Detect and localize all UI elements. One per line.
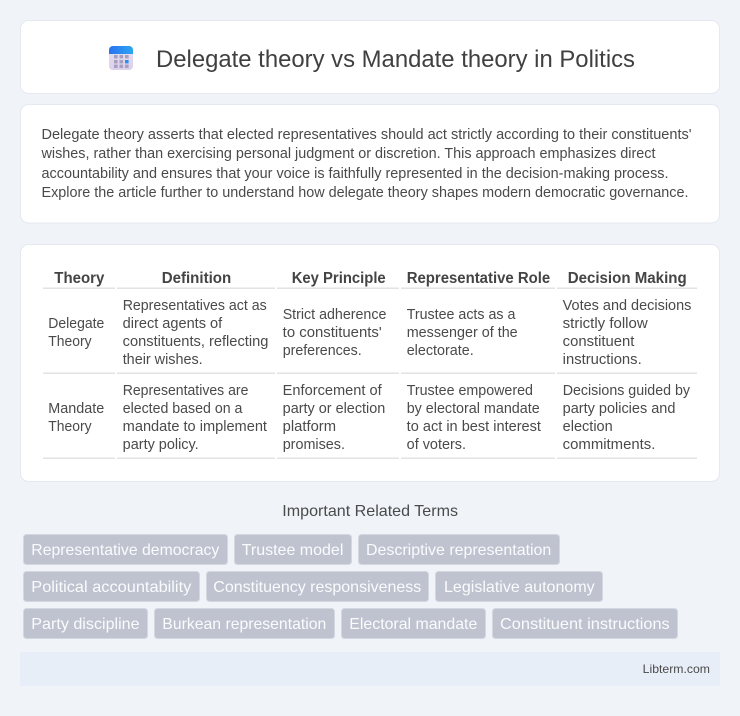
cell: decision making: election	[563, 419, 613, 435]
cell: key principle: to constituents'	[283, 325, 382, 341]
cell: definition: their wishes.	[123, 352, 203, 368]
tag: Constituency responsiveness	[213, 579, 421, 596]
cell: representative role: of voters.	[407, 437, 466, 453]
tag	[206, 572, 428, 602]
footer	[20, 652, 720, 686]
cell: representative role	[407, 383, 541, 453]
tag: Constituent instructions	[500, 616, 670, 633]
tag	[24, 608, 148, 638]
table header row: Representative Role	[407, 270, 550, 287]
cell: key principle	[283, 383, 385, 453]
tag	[24, 572, 200, 602]
cell: representative role: Trustee acts as a	[407, 307, 515, 323]
table header row: Decision Making	[568, 270, 687, 287]
cell: definition	[123, 383, 267, 453]
cell: theory name: Delegate	[48, 316, 104, 332]
cell: decision making: instructions.	[563, 352, 642, 368]
intro paragraph: Delegate theory asserts that elected representatives should act strictly according to their constituents'	[42, 127, 692, 143]
cell: representative role	[407, 307, 518, 359]
cell: decision making: Decisions guided by	[563, 383, 691, 399]
cell: decision making	[563, 298, 691, 368]
tag	[358, 534, 560, 564]
table header row: Definition	[162, 270, 231, 287]
tag	[436, 572, 602, 602]
cell: decision making: party policies and	[563, 401, 675, 417]
cell: key principle: Strict adherence	[283, 307, 386, 323]
tag: Electoral mandate	[349, 616, 477, 633]
tag: Burkean representation	[162, 616, 326, 633]
cell: definition: Representatives act as	[123, 298, 267, 314]
cell: key principle: Enforcement of	[283, 383, 383, 399]
tag: Trustee model	[242, 542, 343, 559]
tag	[342, 608, 486, 638]
table header row: Theory	[54, 270, 104, 287]
tag	[234, 534, 352, 564]
cell: key principle: promises.	[283, 437, 345, 453]
cell: definition	[123, 298, 268, 368]
cell: representative role: to act in best interest	[407, 419, 541, 435]
tag	[492, 608, 678, 638]
cell: representative role: by electoral mandate	[407, 401, 540, 417]
tag: Legislative autonomy	[444, 579, 595, 596]
table header row	[54, 270, 687, 287]
icon: calendar	[109, 46, 133, 70]
tag	[24, 534, 228, 564]
panel: comparison table	[20, 244, 720, 482]
cell: representative role: messenger of the	[407, 325, 518, 341]
cell: definition: mandate to implement	[123, 419, 267, 435]
table row: Delegate Theory	[48, 298, 691, 368]
title: Delegate theory vs Mandate theory in Politics	[156, 46, 635, 73]
cell: key principle: platform	[283, 419, 336, 435]
tag: Political accountability	[31, 579, 191, 596]
cell: definition: direct agents of	[123, 316, 223, 332]
intro paragraph	[41, 127, 692, 201]
cell: decision making	[563, 383, 691, 453]
panel: header	[20, 20, 720, 94]
table header row: Key Principle	[292, 270, 386, 287]
cell: decision making: Votes and decisions	[563, 298, 691, 314]
panel: related term tags	[24, 534, 678, 638]
cell: definition: constituents, reflecting	[123, 334, 268, 350]
cell: decision making: constituent	[563, 334, 634, 350]
cell: theory name: Mandate	[48, 401, 104, 417]
cell: key principle: party or election	[283, 401, 385, 417]
tag	[154, 608, 334, 638]
cell: definition: Representatives are	[123, 383, 248, 399]
heading: related terms: Important Related Terms	[282, 503, 458, 520]
table row: Mandate Theory	[48, 383, 691, 453]
panel: introduction	[20, 104, 720, 223]
cell: key principle	[283, 307, 386, 359]
tag: Party discipline	[31, 616, 140, 633]
tag: Representative democracy	[31, 542, 219, 559]
cell: decision making: commitments.	[563, 437, 655, 453]
cell: theory name	[48, 401, 104, 435]
cell: representative role: Trustee empowered	[407, 383, 533, 399]
cell: decision making: strictly follow	[563, 316, 648, 332]
footer credit: Libterm.com	[643, 662, 710, 676]
intro paragraph: accountability and ensures that your voice is faithfully represented in the decision-making process.	[42, 166, 668, 182]
cell: theory name	[48, 316, 104, 350]
intro paragraph: Explore the article further to understand how delegate theory shapes modern democratic governance.	[42, 185, 688, 201]
cell: theory name: Theory	[48, 334, 92, 350]
cell: definition: party policy.	[123, 437, 199, 453]
cell: key principle: preferences.	[283, 343, 362, 359]
intro paragraph: wishes, rather than exercising personal judgment or discretion. This approach emphasizes direct	[41, 146, 655, 162]
cell: representative role: electorate.	[407, 343, 474, 359]
cell: definition: elected based on a	[123, 401, 242, 417]
cell: theory name: Theory	[48, 419, 92, 435]
tag: Descriptive representation	[366, 542, 551, 559]
